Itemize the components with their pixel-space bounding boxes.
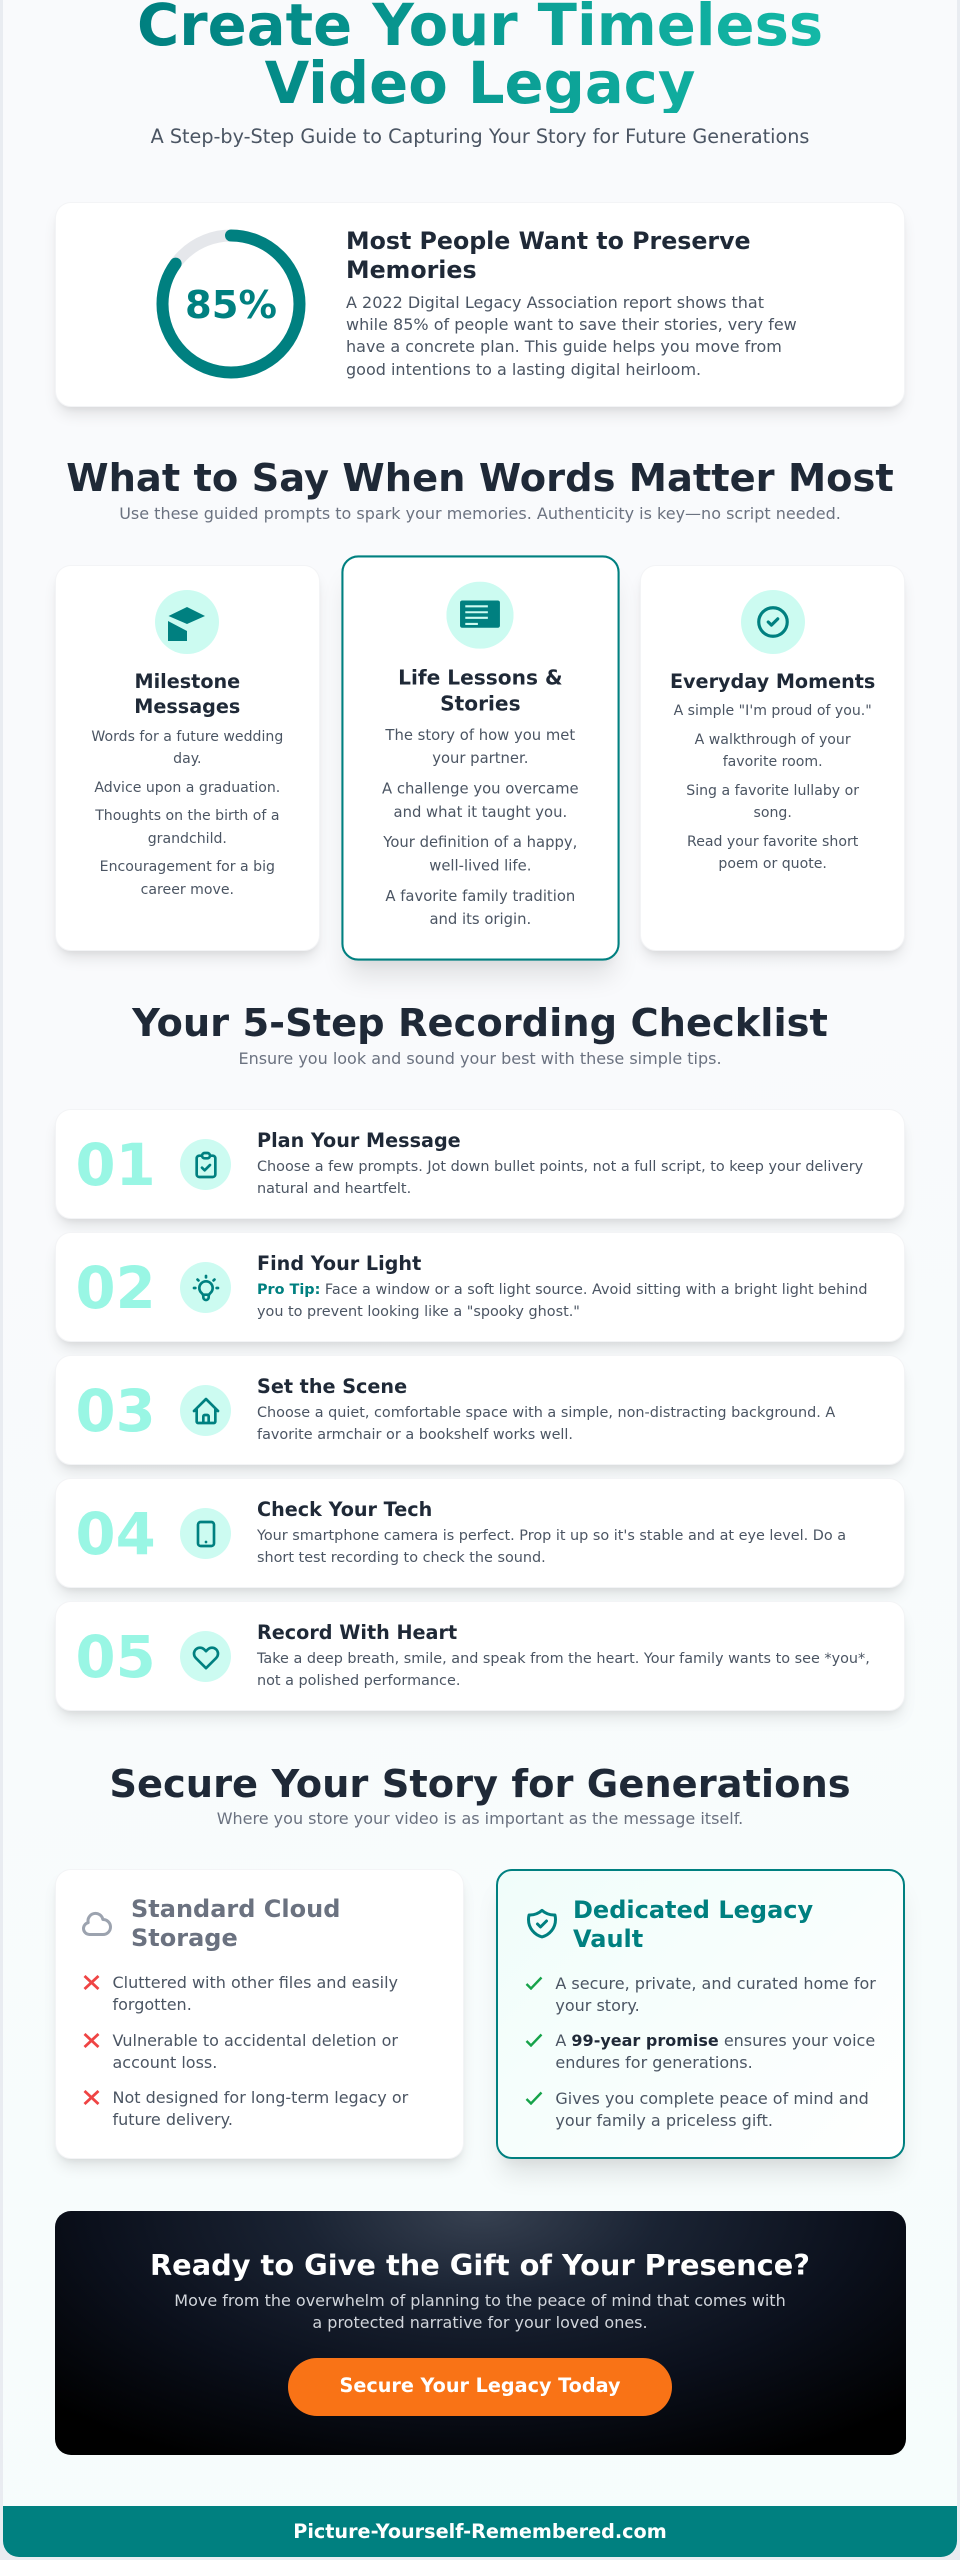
step description — [257, 1158, 863, 1197]
stat heading: Most People Want to Preserve — [346, 227, 751, 255]
card heading — [134, 670, 240, 718]
subheading: what to say: Use these guided prompts to spark your memories. Authenticity is key—no script needed. — [119, 504, 841, 523]
prompt list: well-lived life. — [429, 858, 531, 875]
prompt list — [382, 728, 578, 928]
list item: not designed — [84, 2088, 408, 2129]
step 04 — [55, 1478, 905, 1588]
prompt list: your partner. — [432, 751, 528, 768]
heading: checklist: Your 5-Step Recording Checklist — [132, 1000, 828, 1046]
step description: not a polished performance. — [257, 1673, 460, 1689]
card heading: Messages — [134, 695, 240, 718]
CTA text — [174, 2290, 786, 2332]
list item: cluttered — [84, 1973, 398, 2014]
panel: dedicated legacy vault (highlighted) — [496, 1869, 905, 2159]
panel heading — [131, 1895, 340, 1952]
icon: heart — [180, 1631, 231, 1682]
heading: secure your story: Secure Your Story for Generations — [109, 1762, 851, 1806]
step 05 — [55, 1601, 905, 1711]
item text: account loss. — [112, 2053, 217, 2072]
icon: graduation cap — [155, 590, 219, 654]
prompt list: The story of how you met — [385, 728, 575, 744]
step title: Check Your Tech — [257, 1498, 432, 1521]
prompt list: Advice upon a graduation. — [94, 780, 280, 796]
icon: shield check — [527, 1908, 557, 1938]
prompt list: Your definition of a happy, — [383, 834, 577, 851]
prompt list: Encouragement for a big — [100, 859, 275, 875]
step description: favorite armchair or a bookshelf works well. — [257, 1427, 573, 1443]
prompt list: Sing a favorite lullaby or — [686, 783, 859, 799]
step 02 — [55, 1232, 905, 1342]
footer bar — [3, 2506, 957, 2557]
item text — [555, 2031, 875, 2072]
card heading: Stories — [440, 692, 520, 716]
panel: milestone messages — [55, 565, 320, 951]
panel heading: Storage — [131, 1924, 238, 1952]
panel heading — [573, 1896, 813, 1953]
heading: what to say: What to Say When Words Matter Most — [66, 456, 894, 501]
prompt list: career move. — [141, 882, 234, 898]
panel: life lessons and stories (highlighted) — [341, 555, 619, 961]
item text: forgotten. — [112, 1995, 192, 2014]
step description: Pro Tip: Face a window or a soft light source. Avoid sitting with a bright light behind — [257, 1282, 868, 1298]
prompt list: A simple "I'm proud of you." — [674, 703, 872, 719]
title — [137, 0, 823, 113]
item text: future delivery. — [112, 2110, 233, 2129]
CTA text: Move from the overwhelm of planning to the peace of mind that comes with — [174, 2290, 786, 2310]
donut chart: 85% — [156, 230, 306, 378]
prompt list: favorite room. — [723, 754, 823, 770]
step description: you to prevent looking like a "spooky ghost." — [257, 1304, 580, 1320]
list item: secure home — [526, 1974, 876, 2015]
panel heading: Vault — [573, 1925, 643, 1953]
subtitle: A Step-by-Step Guide to Capturing Your Story for Future Generations — [151, 125, 809, 148]
icon: cross — [84, 1975, 100, 1990]
item text: Cluttered with other files and easily — [112, 1973, 398, 1992]
panel: standard cloud storage — [55, 1869, 464, 2159]
stat body text: A 2022 Digital Legacy Association report shows that — [346, 292, 764, 312]
panel: 85 percent statistic — [55, 202, 905, 407]
step number: 05 — [76, 1624, 156, 1690]
stat body text: have a concrete plan. This guide helps you move from — [346, 337, 782, 356]
item text: endures for generations. — [555, 2053, 753, 2072]
step description: Choose a quiet, comfortable space with a simple, non-distracting background. A — [257, 1404, 835, 1420]
stat heading — [346, 227, 751, 284]
prompt list — [674, 703, 872, 872]
card heading: Everyday Moments — [670, 670, 875, 692]
prompt list: Read your favorite short — [687, 834, 858, 850]
icon: check — [526, 2034, 542, 2047]
list item: peace of mind — [526, 2088, 869, 2130]
prompt list: Words for a future wedding — [91, 729, 283, 745]
step description — [257, 1282, 868, 1320]
icon: check circle — [741, 590, 805, 654]
step number: 03 — [76, 1378, 156, 1444]
CTA button — [288, 2358, 672, 2416]
step description: Your smartphone camera is perfect. Prop it up so it's stable and at eye level. Do a — [257, 1528, 846, 1544]
item text — [555, 1974, 876, 2015]
prompt list: Thoughts on the birth of a — [95, 808, 279, 824]
CTA button: Secure Your Legacy Today — [340, 2374, 620, 2397]
CTA heading: Ready to Give the Gift of Your Presence? — [150, 2248, 810, 2282]
step description: short test recording to check the sound. — [257, 1550, 546, 1566]
step description: Take a deep breath, smile, and speak from the heart. Your family wants to see *you*, — [257, 1650, 870, 1666]
item text — [112, 1973, 398, 2014]
stat body text — [346, 292, 797, 379]
step description: natural and heartfelt. — [257, 1181, 411, 1197]
step description — [257, 1404, 836, 1443]
step number: 04 — [76, 1500, 156, 1568]
prompt list: poem or quote. — [718, 856, 827, 872]
step title: Set the Scene — [257, 1375, 407, 1398]
card heading — [398, 665, 562, 716]
donut chart: 85%: 85% — [185, 283, 277, 328]
footer bar: Picture-Yourself-Remembered.com — [293, 2520, 667, 2543]
item text: A secure, private, and curated home for — [555, 1974, 876, 1992]
step description — [256, 1650, 870, 1689]
item text — [112, 2030, 398, 2072]
icon: cross — [84, 2033, 100, 2048]
icon: cloud — [82, 1912, 112, 1936]
prompt list: song. — [753, 805, 792, 821]
item text — [112, 2088, 408, 2129]
item text: Gives you complete peace of mind and — [555, 2088, 869, 2108]
icon: newspaper — [446, 582, 514, 649]
prompt list: and what it taught you. — [393, 805, 567, 821]
prompt list: and its origin. — [429, 911, 531, 928]
item text: Not designed for long-term legacy or — [112, 2088, 408, 2107]
prompt list: A challenge you overcame — [382, 781, 578, 798]
item text: your story. — [555, 1996, 640, 2015]
icon: light bulb — [180, 1262, 231, 1313]
panel: everyday moments — [640, 565, 905, 951]
CTA text: a protected narrative for your loved ones. — [312, 2313, 648, 2332]
item text — [555, 2088, 869, 2130]
item text: Vulnerable to accidental deletion or — [112, 2030, 398, 2050]
card heading: Life Lessons & — [398, 665, 562, 689]
prompt list: A favorite family tradition — [385, 888, 575, 904]
step 03 — [55, 1355, 905, 1465]
icon: smartphone — [180, 1508, 231, 1559]
stat heading: Memories — [346, 256, 477, 284]
step number: 01 — [76, 1132, 156, 1198]
icon: home — [180, 1385, 231, 1436]
prompt list: A walkthrough of your — [695, 732, 851, 748]
icon: clipboard — [180, 1139, 231, 1190]
subheading: secure your story: Where you store your video is as important as the message itself. — [217, 1809, 743, 1828]
panel heading: Dedicated Legacy — [573, 1896, 813, 1924]
step description: Choose a few prompts. Jot down bullet points, not a full script, to keep your delivery — [257, 1158, 863, 1174]
list item: 99-year promise — [526, 2031, 875, 2072]
step title: Find Your Light — [257, 1252, 421, 1275]
prompt list — [91, 729, 283, 898]
panel heading: Standard Cloud — [131, 1895, 340, 1923]
panel: call to action — [54, 2211, 906, 2454]
step number: 02 — [76, 1254, 156, 1322]
item text: your family a priceless gift. — [555, 2111, 773, 2130]
step 01 — [55, 1109, 905, 1219]
step description — [257, 1528, 846, 1566]
icon: check — [526, 2092, 542, 2105]
icon: cross — [84, 2090, 100, 2105]
stat body text: good intentions to a lasting digital heirloom. — [346, 360, 701, 379]
item text: A 99-year promise ensures your voice — [555, 2031, 875, 2050]
title: Video Legacy — [265, 50, 695, 117]
step title: Plan Your Message — [257, 1129, 461, 1152]
card heading: Milestone — [134, 670, 240, 692]
stat body text: while 85% of people want to save their stories, very few — [346, 315, 797, 334]
subheading: checklist: Ensure you look and sound your best with these simple tips. — [238, 1049, 722, 1068]
prompt list: grandchild. — [148, 831, 227, 847]
icon: check — [526, 1976, 542, 1990]
prompt list: day. — [173, 751, 202, 767]
list item: vulnerable — [84, 2030, 398, 2072]
step title: Record With Heart — [257, 1621, 457, 1644]
